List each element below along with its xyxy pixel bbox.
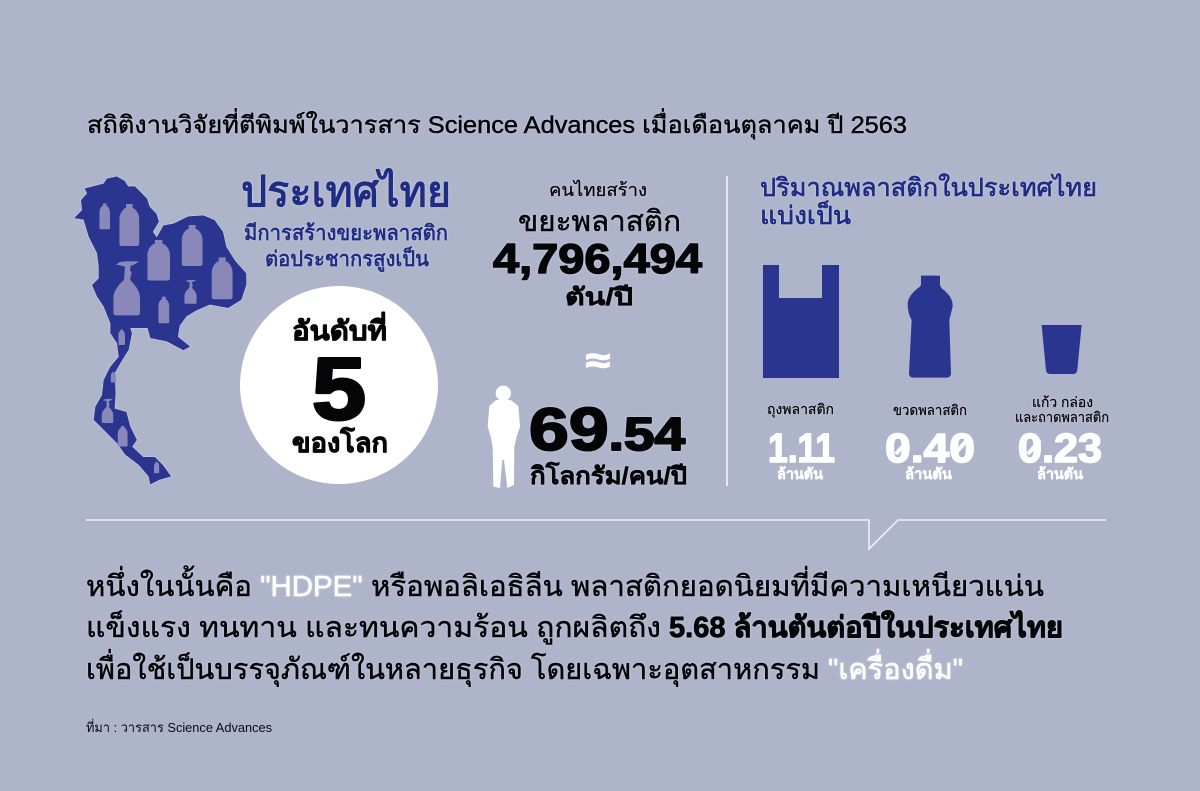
stat: per person: กิโลกรัม/คน/ปี bbox=[530, 461, 687, 490]
stat: total plastic waste bbox=[493, 179, 703, 311]
item: plastic bottles bbox=[885, 402, 975, 483]
source note: ที่มา : วารสาร Science Advances bbox=[86, 719, 272, 735]
stat: per person bbox=[529, 396, 687, 490]
rank circle bbox=[240, 286, 438, 484]
icon: plastic bag bbox=[763, 265, 839, 378]
approx symbol: ≈ bbox=[586, 342, 610, 380]
speech-bubble divider bbox=[86, 520, 1106, 549]
item: plastic bottles: 0.40 bbox=[885, 425, 975, 471]
icon: plastic cup bbox=[1042, 325, 1082, 374]
heading: plastic breakdown: ปริมาณพลาสติกในประเทศไทย bbox=[760, 173, 1097, 202]
item: plastic bags bbox=[767, 401, 835, 483]
subheading: per-capita plastic waste: มีการสร้างขยะพลาสติก bbox=[244, 222, 448, 245]
icon: plastic bottle bbox=[908, 276, 953, 378]
subheading: per-capita plastic waste bbox=[244, 222, 448, 272]
item: plastic bottles: ล้านตัน bbox=[905, 466, 953, 483]
item: cups, boxes and trays: แก้ว กล่อง bbox=[1032, 394, 1093, 410]
stat: total plastic waste: ขยะพลาสติก bbox=[518, 206, 681, 238]
stat: total plastic waste: คนไทยสร้าง bbox=[549, 179, 647, 200]
item: plastic bags: ล้านตัน bbox=[777, 466, 824, 483]
icon: person bbox=[488, 386, 520, 488]
item: cups, boxes and trays: ล้านตัน bbox=[1037, 466, 1084, 483]
rank circle: ของโลก bbox=[292, 426, 388, 458]
map: Thailand filled with plastic bottles bbox=[73, 176, 247, 485]
item: cups, boxes and trays bbox=[1015, 394, 1109, 483]
body paragraph: แข็งแรง ทนทาน และทนความร้อน ถูกผลิตถึง bbox=[86, 609, 661, 645]
rank circle: อันดับที่ bbox=[292, 311, 387, 346]
rank circle: 5 bbox=[312, 339, 366, 438]
item: cups, boxes and trays: และถาดพลาสติก bbox=[1015, 409, 1109, 425]
body paragraph: 5.68 ล้านตันต่อปีในประเทศไทย bbox=[669, 610, 1063, 644]
item: plastic bags: 1.11 bbox=[768, 425, 835, 471]
stat: total plastic waste: 4,796,494 bbox=[493, 235, 703, 282]
subheading: per-capita plastic waste: ต่อประชากรสูงเป็น bbox=[265, 245, 429, 272]
stat: total plastic waste: ตัน/ปี bbox=[565, 284, 633, 311]
body paragraph bbox=[86, 565, 1063, 687]
heading: plastic breakdown bbox=[760, 173, 1097, 230]
item: plastic bags: ถุงพลาสติก bbox=[767, 401, 834, 418]
item: plastic bottles: ขวดพลาสติก bbox=[893, 402, 967, 418]
body paragraph: เพื่อใช้เป็นบรรจุภัณฑ์ในหลายธุรกิจ โดยเฉพาะอุตสาหกรรม "เครื่องดื่ม" bbox=[86, 649, 963, 687]
stat: per person: 69 .54 bbox=[529, 396, 685, 463]
heading: Thailand: ประเทศไทย bbox=[241, 168, 451, 215]
item: cups, boxes and trays: 0.23 bbox=[1018, 425, 1102, 471]
heading: plastic breakdown: แบ่งเป็น bbox=[760, 200, 851, 230]
body paragraph: หนึ่งในนั้นคือ "HDPE" หรือพอลิเอธิลีน พลาสติกยอดนิยมที่มีความเหนียวแน่น bbox=[86, 565, 1044, 603]
header text: สถิติงานวิจัยที่ตีพิมพ์ในวารสาร Science Advances เมื่อเดือนตุลาคม ปี 2563 bbox=[87, 108, 907, 140]
